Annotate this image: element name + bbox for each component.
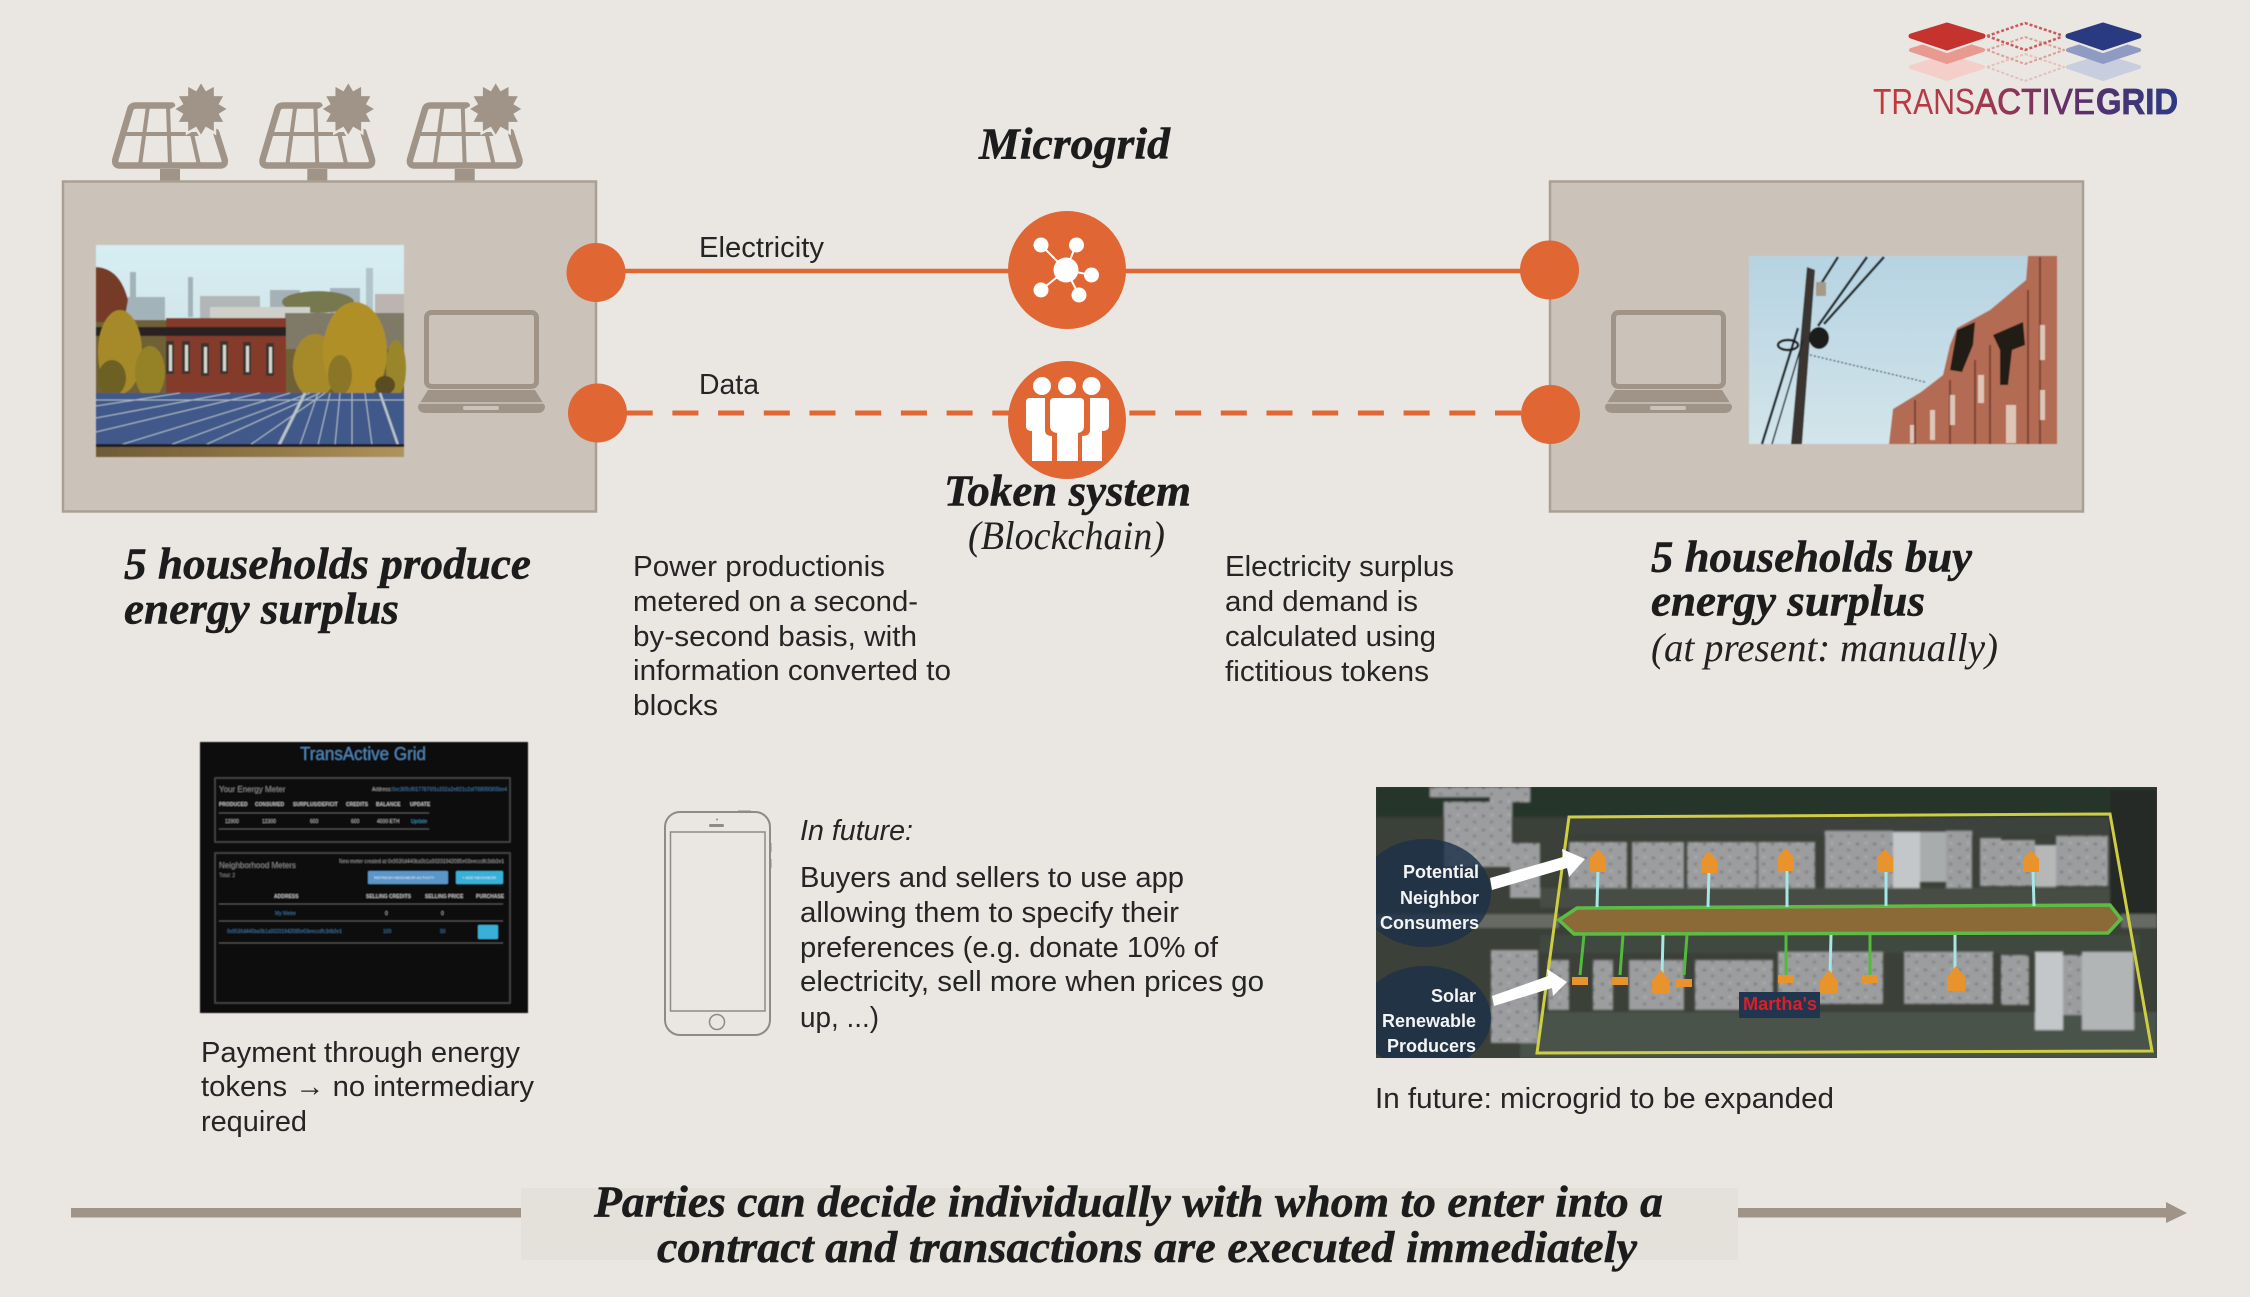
heading: 5 households buy energy surplus [1651, 532, 1998, 670]
icon: token system people [1008, 361, 1126, 479]
arrow: timeline [71, 1202, 2187, 1223]
data dashed line [597, 410, 1549, 416]
panel: buying households [1550, 182, 2083, 512]
connection node: left data [568, 384, 627, 442]
caption: payment through tokens: tokens → no intermediary [201, 1071, 534, 1103]
map label: Martha's [1739, 992, 1820, 1018]
logo: TransActive Grid [1873, 23, 2178, 122]
screenshot: TransActive Grid dashboard: CREDITS [346, 802, 369, 808]
text block: power production metering: by-second basis, with [633, 621, 917, 653]
text block: surplus and demand: and demand is [1225, 586, 1418, 618]
connection node: right electricity [1520, 240, 1579, 300]
callout: bottom conclusion: Parties can decide individually with whom to enter into a [593, 1178, 1663, 1226]
text block: future app: preferences (e.g. donate 10% of [800, 932, 1219, 964]
logo: TransActive Grid: TRANS [1873, 81, 1975, 122]
screenshot: TransActive Grid dashboard: CONSUMED [255, 802, 285, 808]
text block: future app: In future: [800, 815, 913, 847]
subheading: Blockchain: (Blockchain) [968, 513, 1165, 558]
map label: Martha's: Martha's [1743, 994, 1817, 1014]
screenshot: TransActive Grid dashboard: Update [411, 819, 427, 825]
connection node: left electricity [566, 243, 626, 302]
text block: future app [800, 815, 1264, 1034]
icon: laptop [418, 312, 545, 413]
map labels: consumers [1380, 862, 1479, 933]
screenshot: TransActive Grid dashboard: 50 [440, 929, 446, 935]
caption: microgrid expansion: In future: microgrid to be expanded [1375, 1083, 1834, 1115]
screenshot: TransActive Grid dashboard: 4000 ETH [377, 819, 400, 825]
icon: laptop [1605, 312, 1732, 413]
icon: solar panel 3 [410, 81, 524, 182]
text block: surplus and demand [1225, 551, 1454, 688]
logo: TransActive Grid: GRID [2096, 81, 2178, 122]
map labels: producers [1383, 988, 1476, 1052]
screenshot: TransActive Grid dashboard: PRODUCED [219, 802, 248, 808]
heading: 5 households buy energy surplus: (at present: manually) [1651, 625, 1998, 670]
text block: future app: electricity, sell more when prices go [800, 966, 1264, 998]
text block: power production metering: blocks [633, 690, 718, 722]
screenshot: TransActive Grid dashboard: SELLING CREDITS [366, 894, 412, 900]
screenshot: TransActive Grid dashboard: SELLING PRICE [425, 894, 464, 900]
label: Data: Data [699, 369, 760, 401]
screenshot: TransActive Grid dashboard: ADDRESS [274, 894, 299, 900]
map: aerial view of microgrid neighbourhood [1359, 787, 2157, 1070]
callout: bottom conclusion: contract and transactions are executed immediately [657, 1223, 1637, 1272]
text block: surplus and demand: calculated using [1225, 621, 1436, 653]
connection node: right data [1521, 385, 1580, 444]
microgrid boundary [1537, 814, 2152, 1053]
icon: microgrid network [1008, 211, 1126, 329]
screenshot: TransActive Grid dashboard: 600 [310, 819, 319, 825]
text block: future app: Buyers and sellers to use app [800, 862, 1184, 894]
street band [1559, 905, 2121, 934]
screenshot: TransActive Grid dashboard: Neighborhood Meters [219, 861, 296, 870]
electricity line [596, 269, 1549, 273]
photo: rooftop solar with skyline [96, 245, 406, 457]
text block: surplus and demand: Electricity surplus [1225, 551, 1454, 583]
icon: solar panel 2 [262, 81, 376, 182]
heading: 5 households buy energy surplus: energy surplus [1651, 576, 1925, 626]
heading: Microgrid: Microgrid [978, 120, 1171, 168]
heading: 5 households produce energy surplus: energy surplus [124, 584, 399, 634]
screenshot: TransActive Grid dashboard: REFRESH NEIGHBOR ACTIVITY [374, 875, 435, 880]
text block: power production metering: metered on a second- [633, 586, 918, 618]
orange house and solar markers [1572, 848, 2039, 994]
logo: TransActive Grid: ACTIVE [1975, 81, 2095, 122]
screenshot: TransActive Grid dashboard: 12300 [262, 819, 276, 825]
map labels: producers: Solar [1431, 986, 1476, 1006]
text block: power production metering: information converted to [633, 655, 951, 687]
screenshot: TransActive Grid dashboard: 0x9536d440ba0b1a90201942085e03eeccdfc3db3e1 [227, 929, 342, 935]
caption: payment through tokens [201, 1037, 534, 1138]
text block: future app: up, ...) [800, 1002, 879, 1034]
heading: Token system: Token system [944, 466, 1191, 516]
screenshot: TransActive Grid dashboard: BALANCE [376, 802, 401, 808]
photo: utility pole and brick building [1749, 256, 2057, 444]
screenshot: TransActive Grid dashboard: TransActive Grid [300, 744, 426, 764]
map labels: consumers: Potential [1403, 862, 1479, 882]
cyan and green feeders [1580, 870, 2034, 975]
screenshot: TransActive Grid dashboard: New meter created at 0x9536d440ba0b1a90201942085e03eeccdfc3db3e1 [339, 859, 504, 865]
heading: 5 households produce energy surplus [124, 540, 531, 634]
text block: future app: allowing them to specify their [800, 897, 1179, 929]
icon: solar panel 1 [115, 81, 229, 182]
panel: producing households [63, 182, 596, 512]
label: Electricity: Electricity [699, 232, 824, 264]
map labels: producers: Renewable [1382, 1011, 1476, 1031]
screenshot: TransActive Grid dashboard: 0xc305cf0177876f1c202a2e821c2af79805f305be4 [392, 787, 507, 793]
white arrows [1490, 849, 1585, 890]
screenshot: TransActive Grid dashboard: + ADD NEIGHBOR [462, 875, 496, 880]
screenshot: TransActive Grid dashboard [200, 742, 528, 1013]
screenshot: TransActive Grid dashboard: 600 [351, 819, 360, 825]
screenshot: TransActive Grid dashboard: 0 [441, 911, 444, 917]
label bubble: producers [1376, 966, 1491, 1058]
screenshot: TransActive Grid dashboard: Address: [372, 787, 392, 793]
caption: payment through tokens: Payment through energy [201, 1037, 520, 1069]
map labels: consumers: Consumers [1380, 913, 1479, 933]
text block: power production metering [633, 551, 951, 722]
map labels: consumers: Neighbor [1400, 888, 1479, 908]
screenshot: TransActive Grid dashboard: My Meter [275, 911, 296, 917]
screenshot: TransActive Grid dashboard: 12900 [225, 819, 239, 825]
screenshot: TransActive Grid dashboard: 0 [385, 911, 388, 917]
heading: 5 households produce energy surplus: 5 households produce [124, 540, 531, 588]
screenshot: TransActive Grid dashboard: Your Energy Meter [219, 785, 286, 794]
screenshot: TransActive Grid dashboard: Total: 2 [219, 873, 235, 879]
label bubble: consumers [1376, 839, 1491, 947]
heading: 5 households buy energy surplus: 5 households buy [1651, 532, 1972, 582]
text block: power production metering: Power productionis [633, 551, 885, 583]
map labels: producers: Producers [1387, 1036, 1476, 1056]
screenshot: TransActive Grid dashboard: 100 [383, 929, 392, 935]
screenshot: TransActive Grid dashboard: SURPLUS/DEFICIT [293, 802, 338, 808]
screenshot: TransActive Grid dashboard: PURCHASE [476, 894, 505, 900]
screenshot: TransActive Grid dashboard: UPDATE [410, 802, 431, 808]
caption: payment through tokens: required [201, 1106, 307, 1138]
callout: bottom conclusion [521, 1178, 1738, 1272]
text block: surplus and demand: fictitious tokens [1225, 656, 1429, 688]
icon: smartphone [665, 812, 770, 1035]
